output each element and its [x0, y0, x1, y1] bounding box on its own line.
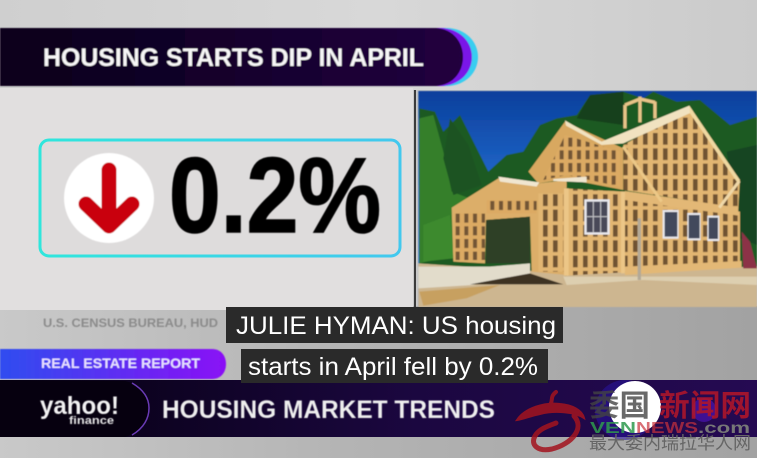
callout box	[40, 140, 400, 256]
watermark: site name: 新闻网	[659, 390, 751, 423]
logo: yahoo finance: finance	[69, 415, 114, 427]
tag: real estate report	[0, 349, 226, 379]
logo: yahoo finance: yahoo!	[40, 392, 119, 420]
tag: real estate report: REAL ESTATE REPORT	[41, 356, 201, 371]
main upper gable	[623, 108, 740, 208]
icon: down arrow	[64, 153, 154, 243]
front gable	[528, 122, 623, 190]
heading: HOUSING STARTS DIP IN APRIL	[43, 44, 424, 72]
main lower wall	[625, 198, 740, 273]
lower third bar	[0, 380, 757, 440]
icon: purple badge	[595, 380, 655, 440]
trees	[419, 92, 757, 275]
centre wall	[565, 188, 625, 276]
watermark: site name: 委国	[589, 390, 650, 423]
panel: statistic	[0, 88, 413, 310]
lower third headline: HOUSING MARKET TRENDS	[162, 396, 495, 424]
roof	[565, 106, 693, 145]
cupola	[625, 97, 655, 128]
braces	[623, 147, 662, 202]
garage wing	[452, 178, 567, 275]
watermark: dragon emblem	[517, 392, 584, 450]
statistic value: 0.2%	[169, 135, 381, 255]
photo: house under construction	[418, 91, 757, 307]
watermark: site name: VEN	[590, 420, 636, 437]
ladder	[742, 232, 757, 268]
watermark: site name	[589, 390, 751, 453]
caption line 1: JULIE HYMAN: US housing	[236, 312, 556, 340]
watermark: site name: 最大委内瑞拉华人网	[589, 433, 751, 453]
watermark: site name: .com	[698, 420, 750, 437]
ground	[418, 263, 757, 307]
title banner	[0, 28, 478, 86]
watermark: site name: NEWS	[636, 420, 698, 437]
divider line	[414, 90, 416, 308]
source label: U.S. CENSUS BUREAU, HUD	[43, 318, 218, 330]
caption line 2: starts in April fell by 0.2%	[248, 353, 538, 381]
windows	[584, 199, 610, 235]
icon: white badge	[609, 381, 661, 433]
